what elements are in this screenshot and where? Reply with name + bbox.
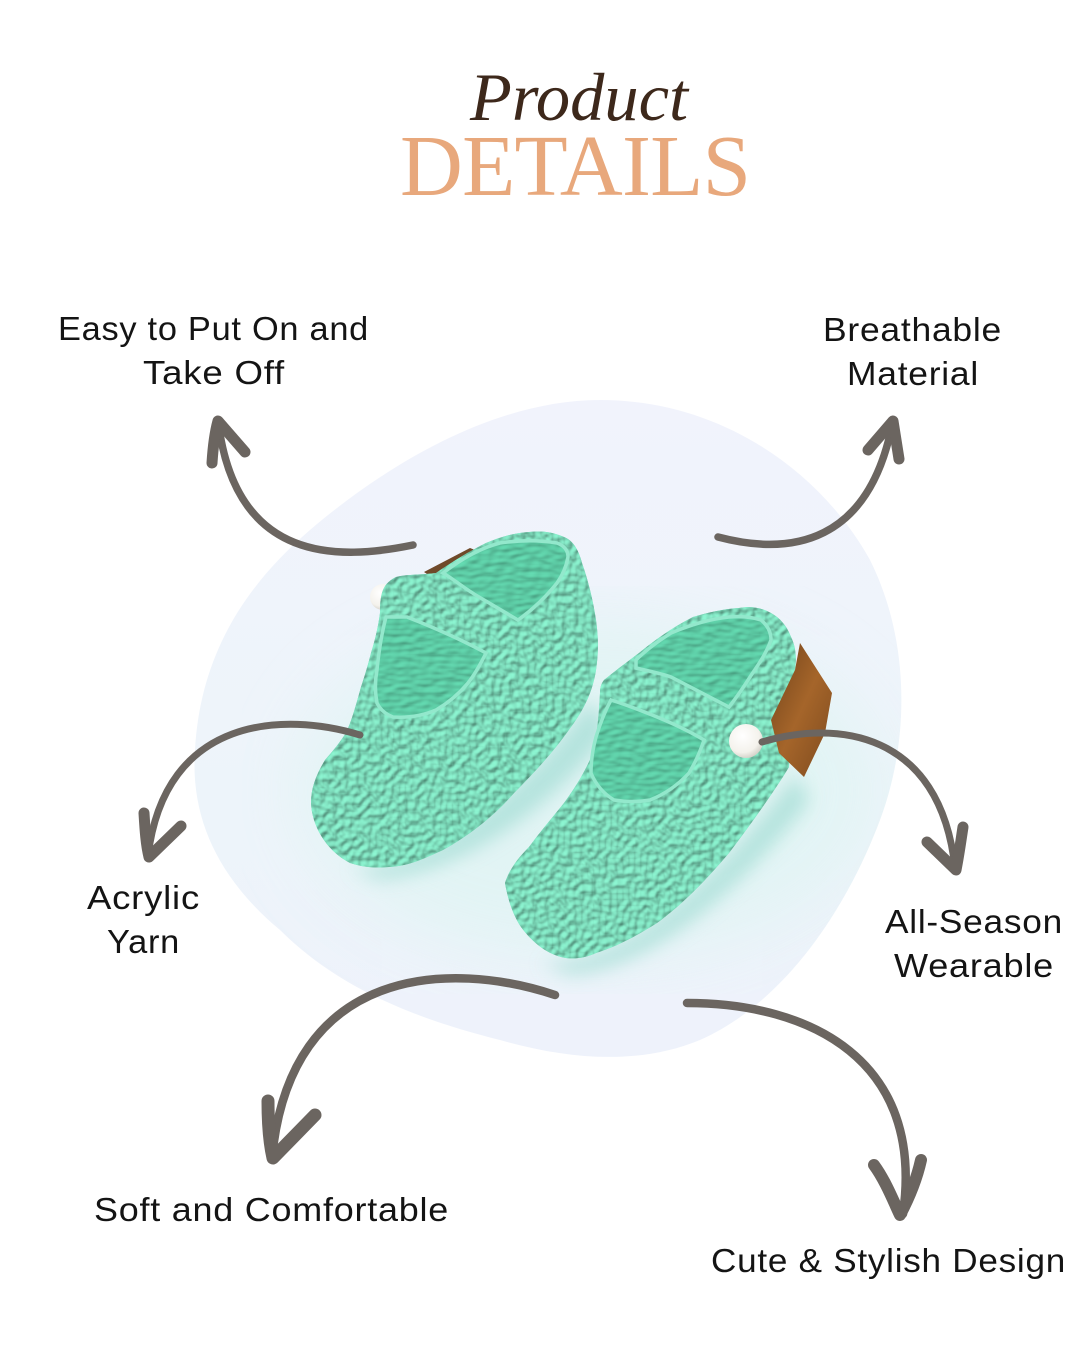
label: all-season wearable [885, 903, 1063, 984]
left shoe [311, 532, 598, 868]
label: acrylic yarn: Yarn [107, 923, 180, 960]
label: all-season wearable: All-Season [885, 903, 1063, 940]
leather tag, left shoe [424, 548, 480, 580]
left shoe toe opening [376, 617, 486, 717]
label: easy to put on and take off: Take Off [143, 354, 285, 391]
right shoe body [505, 607, 796, 958]
label: soft and comfortable: Soft and Comfortable [94, 1191, 449, 1228]
title: Details: DETAILS [400, 117, 751, 214]
label: acrylic yarn [87, 879, 200, 960]
right shoe [505, 607, 832, 958]
arrow: breathable [718, 420, 899, 544]
arrow: acrylic yarn [144, 724, 360, 857]
left shoe heel opening [443, 541, 568, 620]
photo: crochet baby shoes [311, 532, 832, 958]
background blob [194, 400, 901, 1057]
leather tag, right shoe [771, 643, 832, 777]
pearl button, right shoe [729, 724, 763, 758]
right shoe toe opening [591, 700, 704, 802]
title [400, 59, 751, 214]
title: Product: Product [469, 59, 690, 135]
arrow: cute and stylish [687, 1003, 921, 1215]
label: easy to put on and take off [58, 310, 369, 391]
left shoe body [311, 532, 598, 868]
label: breathable material [823, 311, 1002, 392]
pearl button, left shoe [370, 584, 396, 610]
arrow: all-season [762, 733, 963, 870]
label: breathable material: Breathable [823, 311, 1002, 348]
arrow: soft and comfortable [268, 978, 555, 1158]
label: easy to put on and take off: Easy to Put On and [58, 310, 369, 347]
right shoe heel opening [636, 617, 771, 707]
arrow: easy to put on [212, 420, 413, 552]
label: breathable material: Material [847, 355, 979, 392]
shoe shadows [350, 700, 810, 975]
label: all-season wearable: Wearable [894, 947, 1054, 984]
label: acrylic yarn: Acrylic [87, 879, 200, 916]
label: cute and stylish design: Cute & Stylish Design [711, 1242, 1066, 1279]
